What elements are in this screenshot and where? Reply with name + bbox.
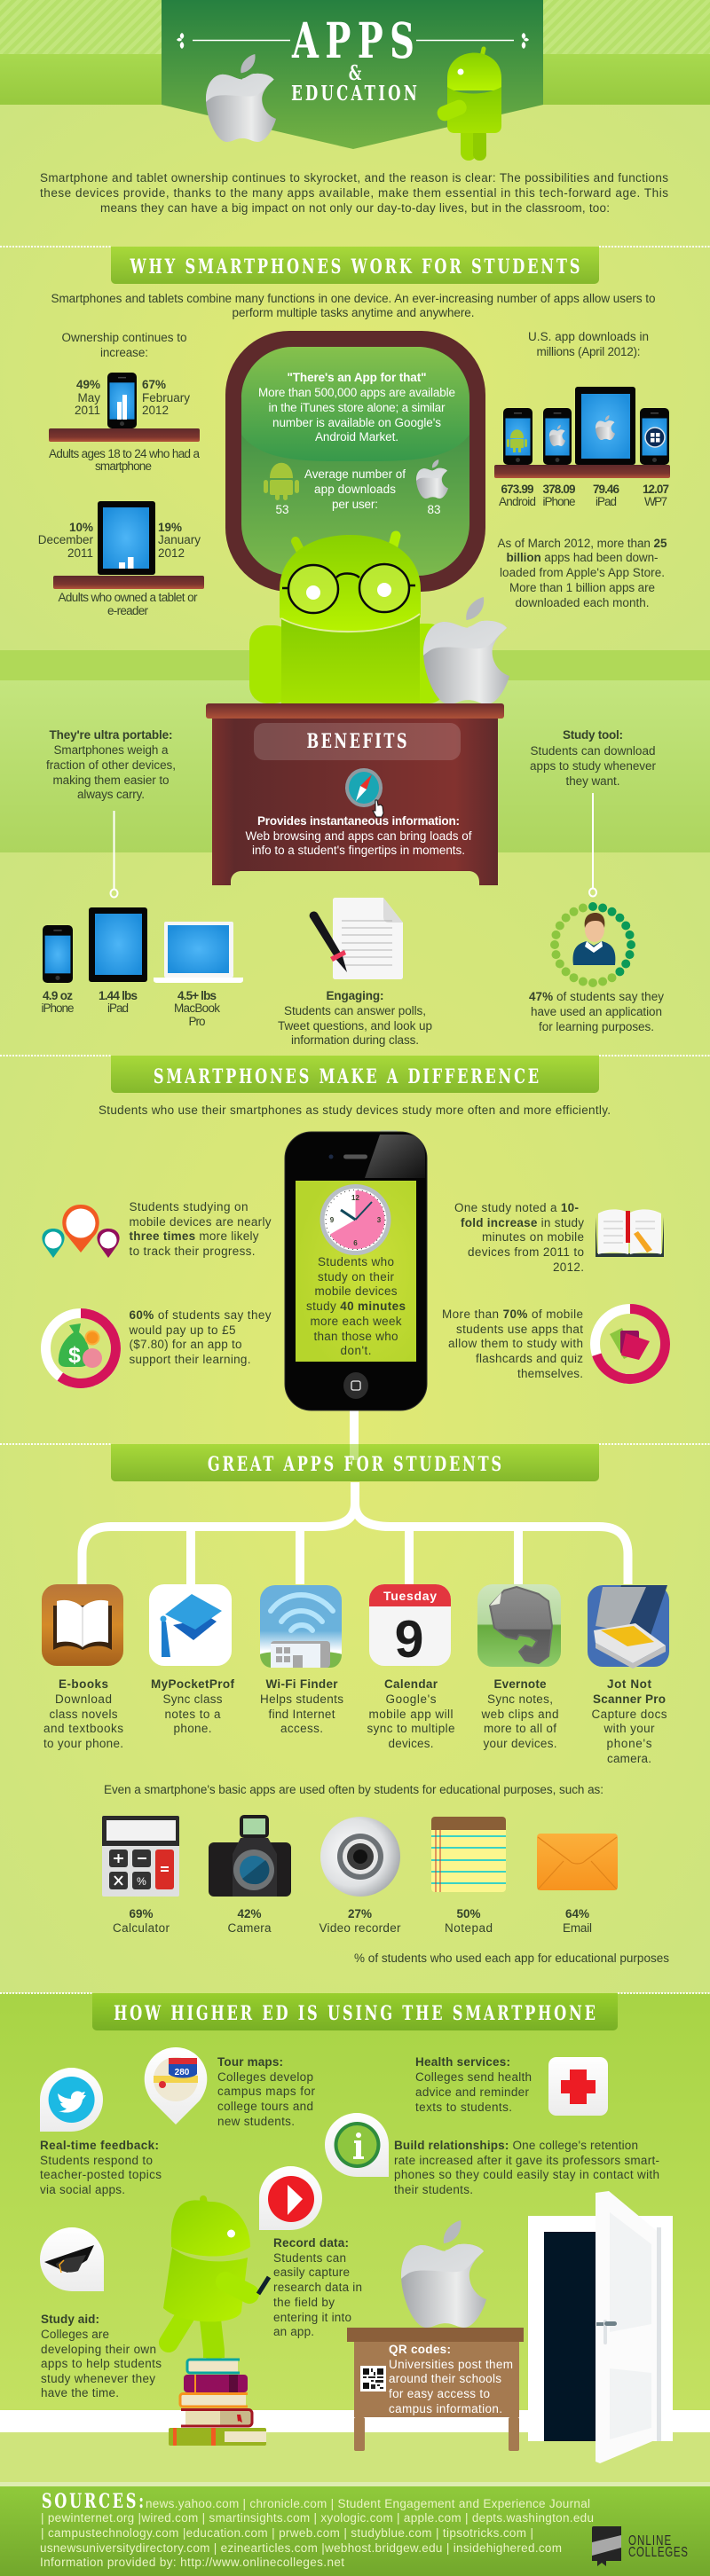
text: three times: three times more likely <box>130 1229 259 1243</box>
text: tour maps: Tour maps: <box>217 2055 283 2069</box>
text: tour maps: campus maps for <box>217 2085 316 2098</box>
icon: open door <box>528 2191 673 2463</box>
app: e-books: to your phone. <box>43 1737 123 1750</box>
app: e-books: and textbooks <box>43 1722 123 1735</box>
device: iphone weight: iPhone <box>41 1001 75 1015</box>
panel: benefits desk: BENEFITS <box>306 729 407 753</box>
text: tour maps: college tours and <box>217 2100 313 2113</box>
text: ultra portable: making them easier to <box>53 774 169 787</box>
icon: notepad: 50% <box>456 1907 481 1920</box>
panel: QR code podium: QR codes: <box>389 2343 451 2356</box>
section heading: smartphones make a difference <box>0 1056 710 1093</box>
panel: ownership tablet: December <box>38 533 93 546</box>
section heading: how higher ed: HOW HIGHER ED IS USING THE SMARTPHONE <box>114 2001 596 2025</box>
sources footer: | campustechnology.com |education.com | prweb.com | studyblue.com | tipsotricks.com | <box>41 2526 533 2540</box>
icon: camera: Camera <box>227 1921 272 1935</box>
text: 25 billion apps <box>497 537 667 609</box>
icon: large iphone <box>285 1130 427 1410</box>
icon: large iphone: study on their <box>318 1270 394 1284</box>
text: engaging: Tweet questions, and look up <box>278 1019 432 1033</box>
icon: info bubble <box>325 2113 389 2177</box>
text: build relationships: phones so they could easily stay in contact with <box>394 2168 659 2181</box>
panel: ownership tablet: 2011 <box>67 546 93 560</box>
panel: US app downloads: WP7 <box>644 495 667 508</box>
app: calendar: mobile app will <box>369 1708 453 1721</box>
icon: stack of books <box>169 2360 266 2446</box>
text: 25 billion apps: As of March 2012, more than 25 <box>497 537 667 550</box>
icon: donut 60 percent money: $ <box>68 1343 81 1368</box>
panel: ownership tablet: January <box>158 533 201 546</box>
text: study aid: apps to help students <box>41 2357 162 2370</box>
text: health services <box>415 2055 532 2114</box>
text: 10-fold: 2012. <box>553 1261 584 1274</box>
app: wi-fi finder <box>260 1585 343 1735</box>
app: mypocketprof: phone. <box>174 1722 211 1735</box>
text: ultra portable: always carry. <box>77 788 145 801</box>
app: jot not scanner pro: with your <box>604 1722 655 1735</box>
device: ipad weight: 1.44 lbs <box>99 989 138 1002</box>
text: three times <box>130 1200 272 1258</box>
app: mypocketprof: Sync class <box>163 1692 223 1706</box>
panel: there's an app for that board: 83 <box>427 503 441 516</box>
icon: calculator: 69% <box>129 1907 154 1920</box>
app: jot not scanner pro: Scanner Pro <box>593 1692 666 1706</box>
panel: US app downloads: 12.07 <box>643 483 669 496</box>
icon: safari compass <box>345 768 383 817</box>
text: 60 percent <box>128 1308 272 1366</box>
section heading: why smartphones work: WHY SMARTPHONES WORK FOR STUDENTS <box>130 255 580 279</box>
text: engaging: Students can answer polls, <box>284 1004 426 1017</box>
text: 60 percent: ($7.80) for an app to <box>130 1338 241 1351</box>
panel: ownership smartphone: 2012 <box>142 404 169 417</box>
device: iphone weight <box>41 925 75 1015</box>
text: tour maps <box>217 2055 316 2128</box>
app: e-books: E-books <box>59 1677 108 1691</box>
section heading: why smartphones work <box>0 247 710 284</box>
section intro: Students who use their smartphones as study devices study more often and more efficiently. <box>99 1103 611 1117</box>
app: e-books: class novels <box>50 1708 118 1721</box>
section intro: perform multiple tasks anytime and anywhere. <box>233 306 474 319</box>
text: three times: to track their progress. <box>130 1245 256 1258</box>
text: build relationships <box>394 2139 659 2196</box>
panel: QR code podium: Universities post them <box>389 2358 513 2371</box>
icon: large iphone: don't. <box>341 1344 371 1357</box>
text: 70 percent: themselves. <box>517 1367 583 1380</box>
text: health services: Colleges send health <box>415 2070 532 2084</box>
app: jot not scanner pro: phone's <box>607 1737 652 1750</box>
icon: large iphone: mobile devices <box>314 1284 398 1298</box>
panel: ownership smartphone: Adults ages 18 to 24 who had a <box>49 447 200 460</box>
icon: apple on podium <box>401 2220 486 2328</box>
icon: video recorder webcam: 27% <box>348 1907 372 1920</box>
icon: android on phone <box>507 429 527 452</box>
icon: tour map pin: 280 <box>175 2068 190 2077</box>
app: wi-fi finder: access. <box>280 1722 323 1735</box>
panel: there's an app for that board <box>225 331 485 592</box>
app: evernote: more to all of <box>484 1722 556 1735</box>
text: chart note: % of students who used each app for educational purposes <box>354 1952 669 1965</box>
icon: email envelope: 64% <box>565 1907 589 1920</box>
panel: ownership smartphone: increase: <box>100 346 148 359</box>
panel: ownership tablet: Adults who owned a tablet or <box>59 591 198 604</box>
app: calendar <box>367 1584 454 1750</box>
app: wi-fi finder: Wi-Fi Finder <box>266 1677 338 1691</box>
panel: US app downloads: 378.09 <box>543 483 575 496</box>
app: calendar: sync to multiple <box>367 1722 454 1735</box>
app: jot not scanner pro: Jot Not <box>607 1677 651 1691</box>
text: real-time feedback: Real-time feedback: <box>40 2139 159 2152</box>
app: jot not scanner pro <box>588 1585 669 1765</box>
app: wi-fi finder: find Internet <box>268 1708 335 1721</box>
text: build relationships: their students. <box>394 2183 473 2196</box>
section heading: great apps <box>0 1444 710 1481</box>
icon: 47 percent dot ring with student <box>550 902 635 987</box>
panel: QR code podium: campus information. <box>389 2402 502 2415</box>
app: wi-fi finder: Helps students <box>260 1692 343 1706</box>
sources footer: usnewsuniversitydirectory.com | ezinearticles.com |webhost.bridgew.edu | insidehighered.com <box>40 2541 562 2555</box>
panel: US app downloads: iPhone <box>543 495 575 508</box>
title banner <box>162 0 543 149</box>
icon: email envelope: Email <box>563 1921 592 1935</box>
text: 25 billion apps: More than 1 billion apps are <box>509 581 655 594</box>
icon: android with phone on books <box>163 2199 269 2358</box>
icon: calculator: Calculator <box>113 1921 170 1935</box>
text: 25 billion apps: loaded from Apple's App Store. <box>500 566 665 579</box>
panel: benefits desk <box>206 703 504 885</box>
icon: twitter bubble <box>40 2068 103 2132</box>
panel: there's an app for that board: per user: <box>332 498 378 511</box>
app: mypocketprof: notes to a <box>165 1708 221 1721</box>
text: study tool: apps to study whenever <box>530 759 657 773</box>
icon: big android with glasses <box>249 535 446 703</box>
section intro: Smartphones and tablets combine many functions in one device. An ever-increasing number of apps allow users to <box>51 292 655 305</box>
icon: donut 60 percent money <box>46 1313 115 1384</box>
logo: online colleges <box>592 2526 688 2566</box>
text: 70 percent: students use apps that <box>456 1323 583 1336</box>
text: study aid <box>41 2313 162 2399</box>
icon: graduation cap bubble <box>40 2227 104 2291</box>
text: study aid: study whenever they <box>41 2372 155 2385</box>
panel: benefits desk: Web browsing and apps can bring loads of <box>245 829 472 843</box>
sources footer: SOURCES: <box>42 2489 144 2513</box>
text: study aid: Study aid: <box>41 2313 99 2326</box>
section heading: great apps: GREAT APPS FOR STUDENTS <box>208 1452 501 1476</box>
text: 60 percent: 60% of students say they <box>130 1308 272 1322</box>
panel: ownership tablet: e-reader <box>107 604 149 617</box>
icon: qr code <box>360 2366 386 2391</box>
app: evernote: Sync notes, <box>487 1692 553 1706</box>
text: tour maps: new students. <box>217 2115 295 2128</box>
text: 10-fold: fold increase in study <box>461 1216 584 1229</box>
text: 70 percent: More than 70% of mobile <box>442 1308 583 1321</box>
intro text: means they can have a big impact on not only our day-to-day lives, but in the classroom, too: <box>100 201 610 215</box>
text: engaging: information during class. <box>291 1033 419 1047</box>
text: 10-fold: devices from 2011 to <box>468 1245 584 1259</box>
panel: there's an app for that board: Android Market. <box>315 430 398 444</box>
text: 47 percent: have used an application <box>531 1005 662 1018</box>
app: jot not scanner pro: Capture docs <box>591 1708 667 1721</box>
text: health services: Health services: <box>415 2055 510 2069</box>
text: record data: an app. <box>273 2325 314 2338</box>
text: ultra portable: fraction of other devices, <box>46 758 176 772</box>
logo: online colleges: ONLINE <box>628 2532 671 2548</box>
icon: record bubble <box>259 2166 322 2230</box>
text: 47 percent: 47% of students say they <box>529 990 664 1003</box>
panel: QR code podium <box>347 2328 524 2451</box>
sources footer: | pewinternet.org |wired.com | smartinsights.com | xyologic.com | apple.com | depts.washington.edu <box>41 2511 594 2525</box>
panel: US app downloads <box>494 330 670 508</box>
text: 47 percent: for learning purposes. <box>539 1020 654 1033</box>
app: calendar: Calendar <box>384 1677 438 1691</box>
app: e-books <box>42 1584 123 1750</box>
text: 10-fold <box>454 1201 584 1274</box>
connector: phone cable <box>350 1410 359 1444</box>
intro text: Smartphone and tablet ownership continues to skyrocket, and the reason is clear: The possibilities and functions <box>40 171 668 185</box>
icon: email envelope <box>537 1834 618 1935</box>
panel: ownership smartphone: February <box>142 391 190 404</box>
text: study tool <box>530 728 657 788</box>
text: study aid: Colleges are <box>41 2328 109 2341</box>
section heading: smartphones make a difference: SMARTPHONES MAKE A DIFFERENCE <box>154 1064 539 1088</box>
text: record data: easily capture <box>273 2266 350 2279</box>
icon: document and pen <box>310 898 403 979</box>
intro text: these devices provide, thanks to the many apps available, make them essential in this tech-forward age. This <box>40 186 668 200</box>
text: engaging <box>278 989 432 1047</box>
panel: US app downloads: millions (April 2012): <box>536 345 641 358</box>
panel: ownership smartphone: 49% <box>76 378 100 391</box>
intro text <box>40 171 668 215</box>
text: ultra portable: Smartphones weigh a <box>53 743 169 757</box>
text: 70 percent <box>442 1308 583 1380</box>
app: mypocketprof: MyPocketProf <box>151 1677 234 1691</box>
icon: clock <box>320 1184 390 1255</box>
icon: android small <box>264 463 299 500</box>
icon: apple small <box>416 459 448 499</box>
text: 60 percent: support their learning. <box>130 1353 250 1366</box>
text: study tool: Study tool: <box>563 728 623 742</box>
text: 70 percent: flashcards and quiz <box>476 1352 583 1365</box>
panel: there's an app for that board: number is available on Google's <box>272 416 441 429</box>
panel: QR code podium: for easy access to <box>389 2387 490 2400</box>
icon: clock: 6 <box>353 1239 358 1247</box>
text: record data: research data in <box>273 2281 362 2294</box>
text: 25 billion apps: downloaded each month. <box>515 596 650 609</box>
panel: ownership smartphone: smartphone <box>95 459 152 473</box>
panel: ownership smartphone: Ownership continues to <box>62 331 186 344</box>
text: study tool: Students can download <box>531 744 655 758</box>
text: build relationships: Build relationships: One college's retention <box>394 2139 638 2152</box>
section heading: how higher ed <box>0 1993 710 2030</box>
text: real-time feedback: Students respond to <box>40 2154 153 2167</box>
app: calendar: 9 <box>395 1610 423 1669</box>
text: health services: texts to students. <box>415 2101 512 2114</box>
text: engaging: Engaging: <box>327 989 383 1002</box>
panel: US app downloads: U.S. app downloads in <box>528 330 649 343</box>
app: jot not scanner pro: camera. <box>607 1752 651 1765</box>
connector: app tree <box>82 1482 628 1584</box>
text: 60 percent: would pay up to £5 <box>128 1323 236 1337</box>
app: evernote: Evernote <box>493 1677 547 1691</box>
icon: large iphone: Students who <box>318 1255 394 1268</box>
text: study tool: they want. <box>566 774 619 788</box>
panel: ownership smartphone <box>49 331 200 473</box>
text: record data: Record data: <box>273 2236 349 2250</box>
icon: open book <box>596 1209 664 1257</box>
panel: there's an app for that board: app downloads <box>314 483 396 496</box>
text: tour maps: Colleges develop <box>217 2070 313 2084</box>
panel: benefits desk: info to a student's fingertips in moments. <box>252 844 465 857</box>
sources footer: Information provided by: http://www.onlinecolleges.net <box>40 2556 344 2569</box>
device: macbook weight: Pro <box>188 1015 206 1028</box>
icon: clock: 12 <box>351 1194 359 1202</box>
text: record data <box>273 2236 362 2338</box>
text: record data: the field by <box>273 2296 335 2309</box>
panel: US app downloads: 673.99 <box>501 483 534 496</box>
icon: apple logo (top) <box>206 54 276 142</box>
icon: calculator: % <box>137 1875 146 1888</box>
text: real-time feedback: via social apps. <box>40 2183 125 2196</box>
text: three times: mobile devices are nearly <box>130 1215 272 1229</box>
icon: clock: 9 <box>330 1216 335 1224</box>
panel: there's an app for that board: 53 <box>275 503 289 516</box>
panel: there's an app for that board: in the iTunes store alone; a similar <box>268 401 446 414</box>
text: 25 billion apps: billion apps had been down- <box>506 551 659 564</box>
panel: US app downloads: 79.46 <box>593 483 619 496</box>
device: macbook weight <box>154 922 243 1028</box>
app: e-books: Download <box>55 1692 112 1706</box>
panel: there's an app for that board: Average number of <box>304 467 406 481</box>
app: evernote: web clips and <box>481 1708 559 1721</box>
text: basic apps intro: Even a smartphone's basic apps are used often by students for educational purposes, such as: <box>104 1783 604 1796</box>
app: calendar: devices. <box>389 1737 433 1750</box>
icon: health cross <box>548 2057 608 2116</box>
icon: large iphone: more each week <box>311 1315 402 1328</box>
device: macbook weight: 4.5+ lbs <box>178 989 217 1002</box>
app: calendar: Google's <box>385 1692 437 1706</box>
logo: online colleges: COLLEGES <box>628 2543 688 2559</box>
panel: ownership tablet: 10% <box>69 521 93 534</box>
icon: tour map pin <box>145 2047 207 2124</box>
text: record data: Students can <box>273 2251 346 2265</box>
app: calendar: Tuesday <box>383 1589 437 1603</box>
device: macbook weight: MacBook <box>174 1001 220 1015</box>
device: ipad weight: iPad <box>107 1001 129 1015</box>
text: build relationships: rate increased after it gave its professors smart- <box>394 2154 659 2167</box>
icon: clock: 3 <box>377 1216 382 1224</box>
text: 10-fold: minutes on mobile <box>482 1230 584 1244</box>
panel: there's an app for that board: "There's an App for that" <box>288 371 426 384</box>
title banner: APPS <box>291 12 414 70</box>
panel: ownership smartphone: May <box>77 391 100 404</box>
device: ipad weight <box>89 907 147 1015</box>
connector: portable <box>110 811 117 898</box>
icon: donut 70 percent cards <box>595 1309 666 1379</box>
text: three times: Students studying on <box>130 1200 248 1213</box>
text: study aid: developing their own <box>41 2343 156 2356</box>
text: record data: entering it into <box>273 2311 351 2324</box>
app: mypocketprof <box>149 1584 234 1735</box>
text: 10-fold: One study noted a 10- <box>454 1201 579 1214</box>
text: 70 percent: allow them to study with <box>448 1337 583 1350</box>
connector: study tool <box>589 793 596 896</box>
icon: large iphone: than those who <box>314 1330 398 1343</box>
icon: large iphone: study 40 minutes <box>306 1300 406 1313</box>
text: ultra portable: They're ultra portable: <box>50 728 172 742</box>
panel: US app downloads: Android <box>499 495 536 508</box>
icon: notepad: Notepad <box>445 1921 493 1935</box>
panel: benefits desk: Provides instantaneous information: <box>257 814 460 828</box>
panel: ownership smartphone: 2011 <box>75 404 100 417</box>
text: 47 percent <box>529 990 664 1033</box>
text: ultra portable <box>46 728 176 801</box>
text: study aid: have the time. <box>41 2386 119 2399</box>
icon: video recorder webcam: Video recorder <box>320 1921 401 1935</box>
icon: camera: 42% <box>237 1907 262 1920</box>
panel: ownership tablet: 2012 <box>158 546 185 560</box>
sources footer <box>40 2489 594 2569</box>
icon: calculator <box>102 1816 179 1935</box>
title banner: EDUCATION <box>291 81 417 106</box>
app: evernote: your devices. <box>483 1737 557 1750</box>
icon: big apple on desk <box>423 597 509 704</box>
panel: there's an app for that board: More than 500,000 apps are available <box>258 386 455 399</box>
icon: video recorder webcam <box>320 1817 401 1935</box>
sources footer: news.yahoo.com | chronicle.com | Student Engagement and Experience Journal <box>146 2497 590 2510</box>
device: iphone weight: 4.9 oz <box>43 989 73 1002</box>
title banner: & <box>349 60 361 85</box>
app: evernote <box>477 1584 561 1750</box>
panel: ownership tablet <box>38 501 204 617</box>
panel: US app downloads: iPad <box>596 495 617 508</box>
icon: notepad <box>431 1817 506 1935</box>
icon: map pins <box>42 1205 120 1258</box>
icon: camera <box>209 1815 291 1935</box>
section intro <box>51 292 655 319</box>
text: health services: advice and reminder <box>415 2085 529 2099</box>
panel: QR code podium: around their schools <box>389 2372 501 2385</box>
text: real-time feedback <box>40 2139 162 2196</box>
text: real-time feedback: teacher-posted topics <box>40 2168 162 2181</box>
icon: android mascot (top) <box>435 49 501 161</box>
panel: ownership smartphone: 67% <box>142 378 166 391</box>
panel: ownership tablet: 19% <box>158 521 182 534</box>
